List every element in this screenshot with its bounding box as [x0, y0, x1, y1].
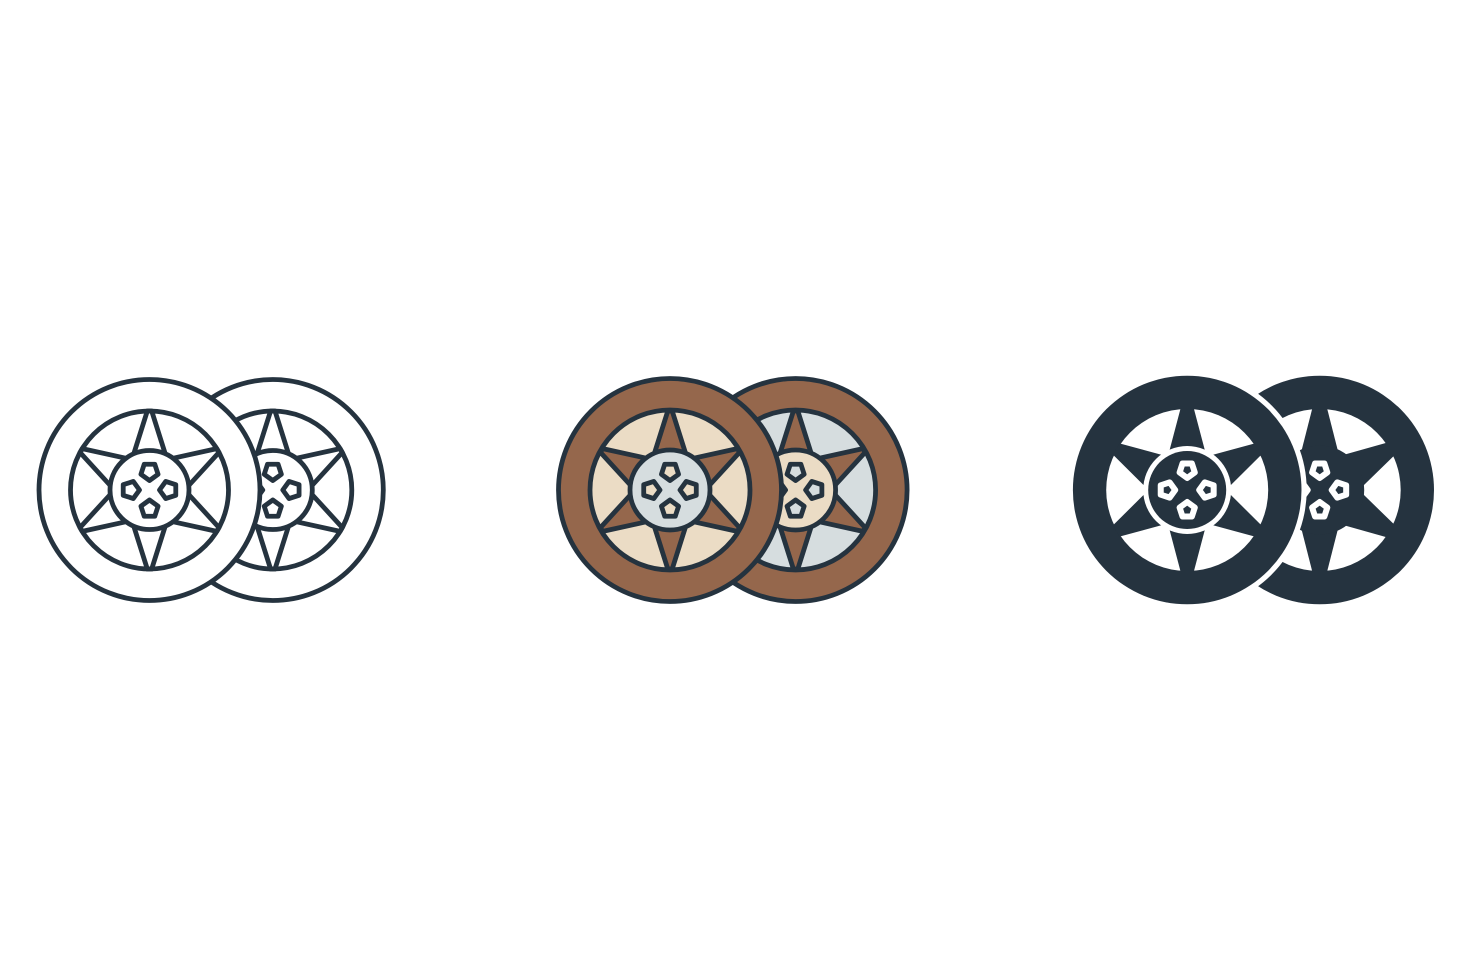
icon: outline wheels [39, 380, 383, 600]
back wheel coloured [684, 378, 907, 602]
back wheel outline [162, 380, 383, 600]
front wheel solid [1068, 370, 1307, 610]
back wheel solid [1205, 376, 1434, 604]
front wheel coloured [558, 378, 782, 602]
icon: coloured wheels [558, 378, 907, 602]
icon: solid wheels [1068, 370, 1434, 610]
front wheel outline [39, 380, 260, 600]
